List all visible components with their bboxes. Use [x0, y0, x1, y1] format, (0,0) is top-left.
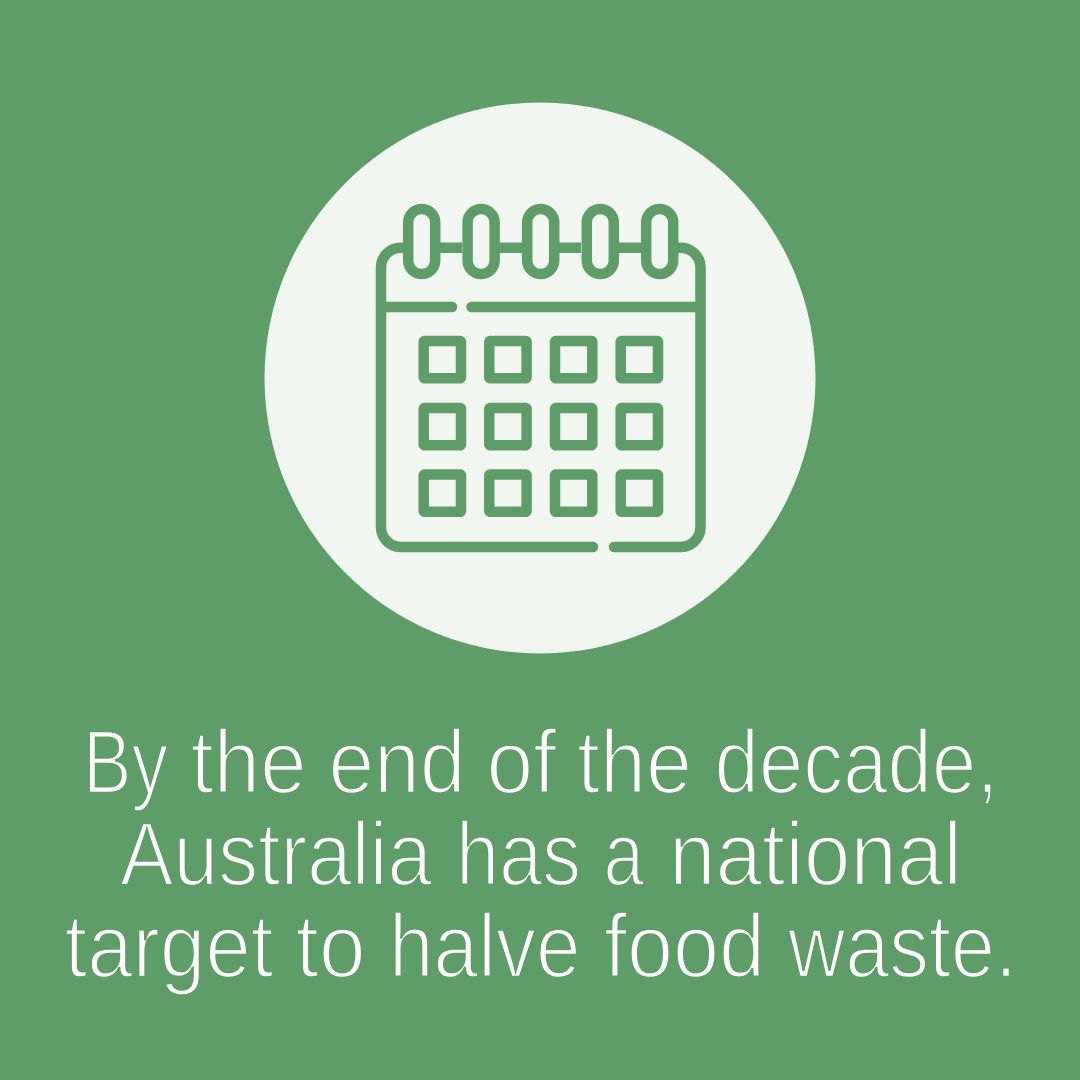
- headline line 1: By: [83, 713, 168, 813]
- panel: icon circle: [264, 102, 816, 654]
- headline line 1: decade,: [714, 713, 998, 813]
- headline line 2: a: [604, 805, 645, 905]
- headline text: [64, 713, 1017, 997]
- headline line 2: [120, 805, 962, 905]
- header divider: [381, 302, 700, 312]
- headline line 3: food: [604, 897, 765, 997]
- headline line 2: has: [456, 805, 581, 905]
- binding segments between rings: [440, 242, 641, 253]
- headline line 1: the: [577, 713, 692, 813]
- headline line 3: waste.: [787, 897, 1017, 997]
- headline line 2: Australia: [120, 805, 433, 905]
- headline line 1: [83, 713, 998, 813]
- calendar body outline: [381, 248, 700, 547]
- headline line 1: the: [190, 713, 306, 813]
- headline line 3: target: [64, 897, 274, 997]
- headline line 3: to: [296, 897, 366, 997]
- binding rings: [408, 209, 673, 274]
- headline line 3: halve: [389, 897, 580, 997]
- headline line 3: [64, 897, 1017, 997]
- headline line 1: of: [486, 713, 557, 813]
- date grid: [424, 341, 658, 512]
- headline line 2: national: [669, 805, 962, 905]
- icon: spiral-bound calendar: [381, 209, 700, 547]
- headline line 1: end: [328, 713, 466, 813]
